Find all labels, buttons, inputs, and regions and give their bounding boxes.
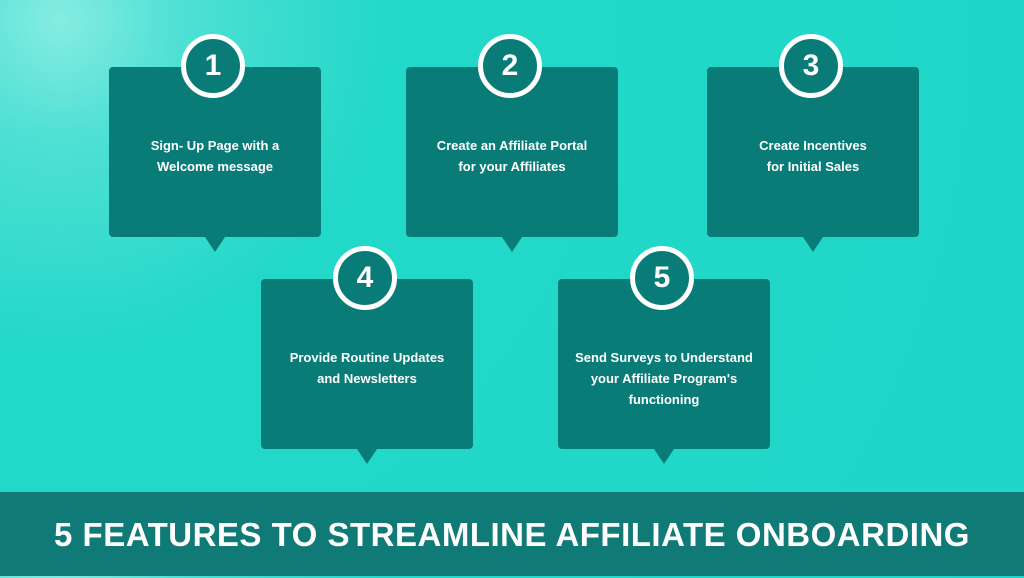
card 1: Welcome message: [157, 159, 273, 174]
card 5: Send Surveys to Understand: [575, 350, 753, 365]
text: 1: [205, 49, 221, 82]
card 2: for your Affiliates: [458, 159, 566, 174]
card 1: Sign- Up Page with a: [151, 138, 279, 153]
card 3: Create Incentives: [759, 138, 867, 153]
card 2: Create an Affiliate Portal: [437, 138, 587, 153]
card 4: Provide Routine Updates: [290, 350, 444, 365]
card 1: [109, 67, 321, 237]
text: 4: [357, 261, 373, 294]
card 5: functioning: [629, 392, 699, 407]
card 4: [261, 279, 473, 449]
card 2: [406, 67, 618, 237]
text: 2: [502, 49, 518, 82]
card 4: and Newsletters: [317, 371, 417, 386]
card 3: [707, 67, 919, 237]
title band: [0, 492, 1024, 576]
text: 3: [803, 49, 819, 82]
text: 5: [654, 261, 670, 294]
card 5: your Affiliate Program's: [591, 371, 737, 386]
card 3: for Initial Sales: [767, 159, 859, 174]
title band: 5 FEATURES TO STREAMLINE AFFILIATE ONBOARDING: [54, 516, 970, 553]
card 5: [558, 279, 770, 449]
